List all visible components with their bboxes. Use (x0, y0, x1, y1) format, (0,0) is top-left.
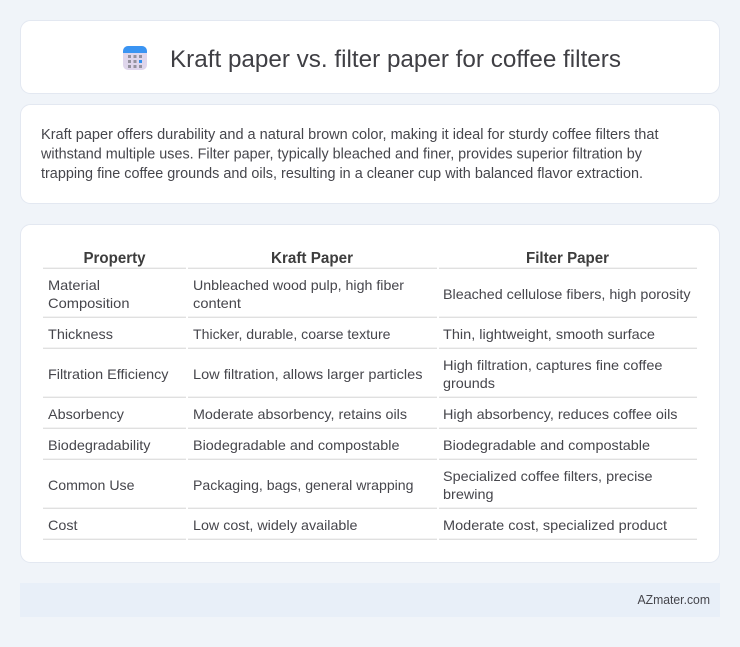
title: Kraft paper vs. filter paper for coffee filters (170, 46, 621, 73)
table header row: Kraft Paper (271, 250, 353, 267)
row: filtration efficiency: High filtration, captures fine coffee (443, 357, 663, 373)
panel: summary (20, 104, 720, 204)
panel: title header (20, 20, 720, 94)
table header row (84, 250, 609, 267)
row: biodegradability (48, 437, 650, 453)
row: filtration efficiency: Low filtration, allows larger particles (193, 366, 422, 382)
row: material composition: content (193, 295, 241, 311)
row: material composition: Composition (48, 295, 130, 311)
table header row: Property (84, 250, 146, 267)
row: cost: Cost (48, 517, 78, 533)
row: common use (48, 468, 653, 502)
row: biodegradability: Biodegradability (48, 437, 150, 453)
row: filtration efficiency (48, 357, 663, 391)
row: common use: Packaging, bags, general wrapping (193, 477, 414, 493)
row: biodegradability: Biodegradable and compostable (443, 437, 650, 453)
summary text: Kraft paper offers durability and a natural brown color, making it ideal for sturdy coffee filters that (41, 127, 659, 143)
icon: calendar (123, 46, 147, 70)
row: filtration efficiency: grounds (443, 375, 495, 391)
row: absorbency: Moderate absorbency, retains oils (193, 406, 407, 422)
row: thickness: Thin, lightweight, smooth surface (443, 326, 655, 342)
row: cost (48, 517, 667, 533)
row: absorbency (48, 406, 678, 422)
row: biodegradability: Biodegradable and compostable (193, 437, 400, 453)
row: cost: Moderate cost, specialized product (443, 517, 667, 533)
panel: comparison table (20, 224, 720, 562)
row: absorbency: Absorbency (48, 406, 124, 422)
row: absorbency: High absorbency, reduces coffee oils (443, 406, 678, 422)
row: common use: Common Use (48, 477, 135, 493)
row: common use: brewing (443, 486, 494, 502)
summary text: trapping fine coffee grounds and oils, resulting in a cleaner cup with balanced flavor extraction. (41, 166, 643, 182)
row: thickness (48, 326, 655, 342)
table header row: Filter Paper (526, 250, 609, 267)
footer bar (20, 583, 720, 617)
row: material composition: Bleached cellulose fibers, high porosity (443, 286, 690, 302)
summary text (40, 127, 659, 182)
row: cost: Low cost, widely available (193, 517, 358, 533)
row: thickness: Thickness (48, 326, 113, 342)
footer credit: AZmater.com (638, 593, 710, 607)
row: material composition (48, 277, 690, 311)
row: material composition: Unbleached wood pulp, high fiber (193, 277, 404, 293)
row: thickness: Thicker, durable, coarse texture (193, 326, 391, 342)
row: filtration efficiency: Filtration Efficiency (48, 366, 168, 382)
summary text: withstand multiple uses. Filter paper, typically bleached and finer, provides superior filtration by (40, 146, 643, 162)
row: common use: Specialized coffee filters, precise (443, 468, 653, 484)
row: material composition: Material (48, 277, 100, 293)
